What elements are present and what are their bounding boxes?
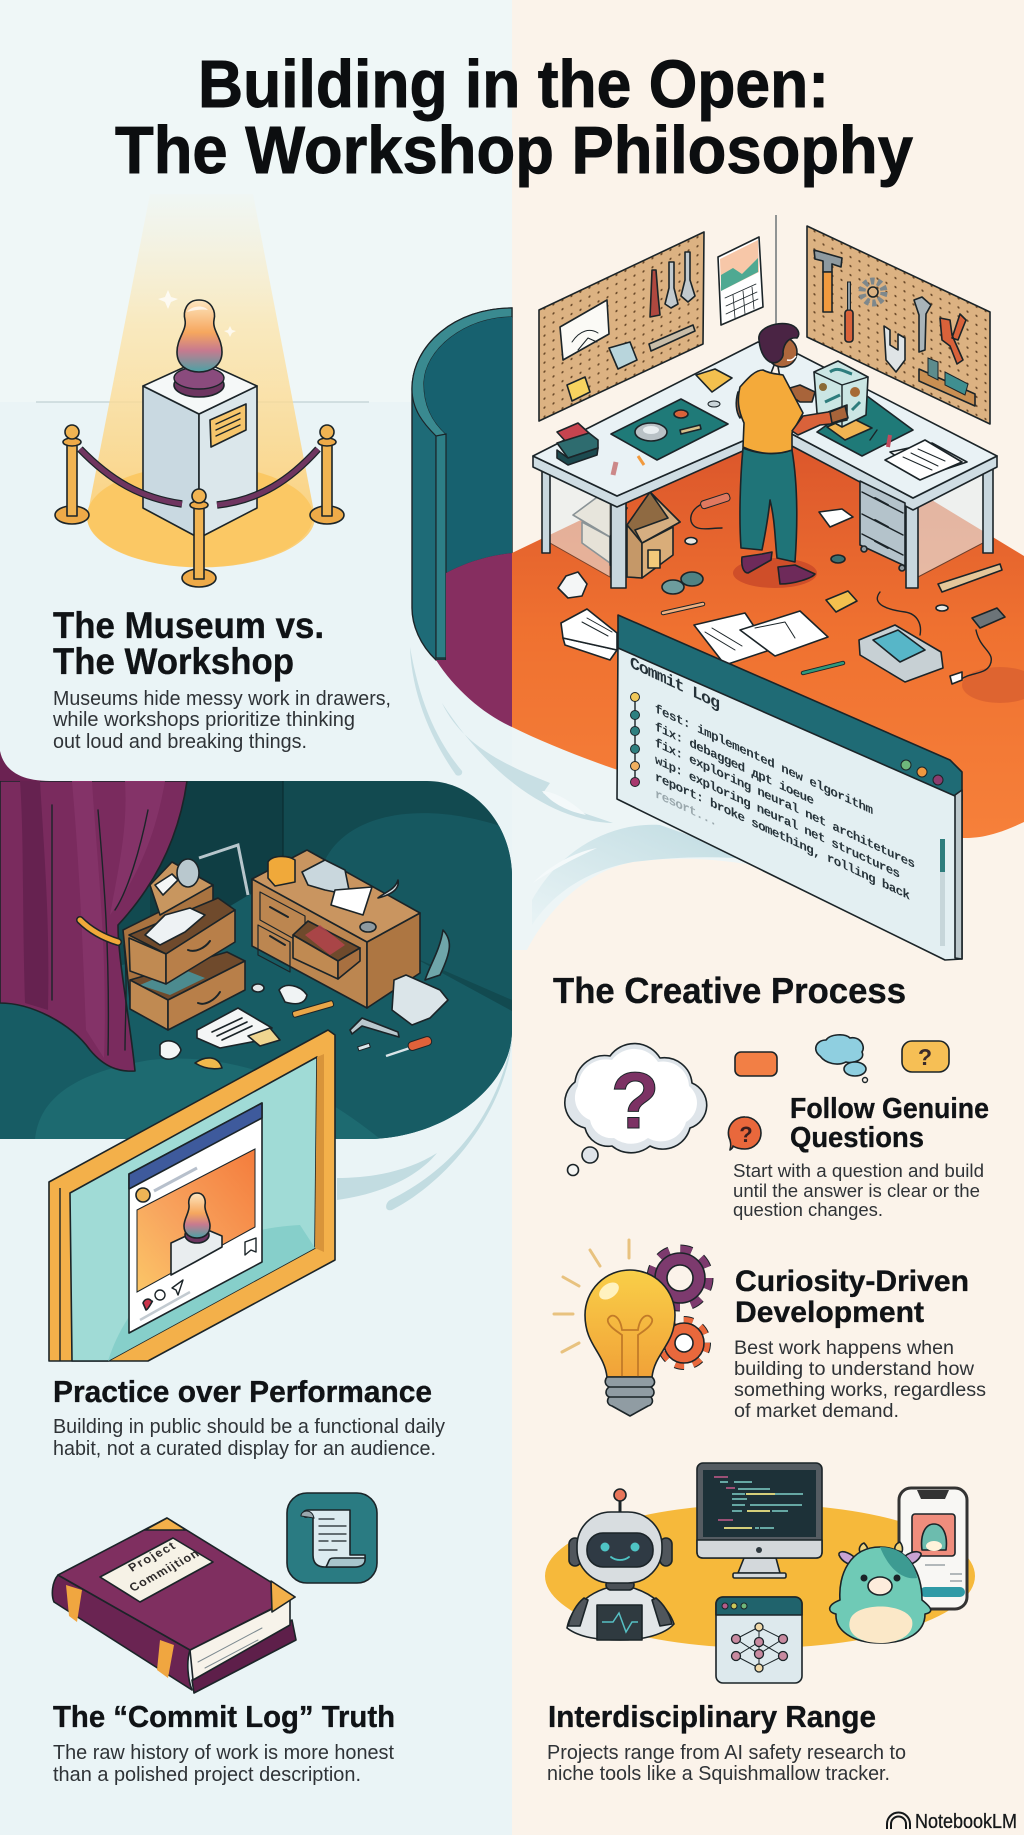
book label text: Commijtion xyxy=(126,1547,202,1594)
text: interdisciplinary description xyxy=(547,1741,906,1785)
illustration: museum pedestal xyxy=(36,194,369,587)
decorative swooshes xyxy=(410,647,613,883)
text: curiosity description: building to understand how xyxy=(734,1358,975,1380)
background: lower cool tone xyxy=(0,402,512,1835)
velvet rope xyxy=(80,449,318,505)
icon: scroll xyxy=(287,1493,377,1583)
text: museum description: while workshops prioritize thinking xyxy=(52,708,355,731)
commit messages: fix: exploring neural net architetures xyxy=(655,736,915,872)
wall highlight xyxy=(325,813,512,1000)
wall calendar xyxy=(718,237,763,325)
text: curiosity description: Best work happens when xyxy=(734,1337,954,1359)
curtain drum xyxy=(412,308,512,727)
background: cool region between sections xyxy=(512,720,780,950)
text: commit log description xyxy=(53,1741,394,1786)
heading: museum vs workshop xyxy=(53,605,324,682)
text: curiosity description xyxy=(734,1337,986,1422)
book pages xyxy=(192,1620,296,1693)
desktop monitor with code xyxy=(697,1463,822,1578)
social post card xyxy=(129,1103,262,1333)
teal mirror xyxy=(70,1057,317,1361)
heading: practice over performance: Practice over Performance xyxy=(53,1374,432,1409)
mirror reflection xyxy=(108,1225,315,1361)
floor clutter xyxy=(558,493,1005,684)
near arm xyxy=(792,405,847,435)
commit timeline xyxy=(630,692,640,786)
icon: light bulb with gears xyxy=(554,1240,709,1416)
commit messages: wip: exploring neural net structures xyxy=(655,753,900,882)
text: museum description: out loud and breaking things. xyxy=(53,730,307,753)
icon: thought cloud with question mark xyxy=(565,1044,707,1176)
text: practice description xyxy=(53,1415,446,1460)
left pegboard xyxy=(539,232,704,421)
commit messages: report: broke something, rolling back xyxy=(655,770,910,904)
background: mist near window xyxy=(532,825,760,925)
glowing artifact xyxy=(158,290,236,397)
heading: museum vs workshop: The Workshop xyxy=(53,641,294,682)
shoes xyxy=(742,552,772,573)
floor stain xyxy=(962,667,1024,703)
floor xyxy=(0,880,512,1139)
left drawers xyxy=(123,845,248,1030)
stanchion left xyxy=(55,425,89,524)
back wall xyxy=(150,781,282,916)
yellow ellipse backdrop xyxy=(545,1504,975,1648)
gold frame xyxy=(49,1030,335,1361)
trousers xyxy=(740,448,797,562)
right dresser xyxy=(252,850,420,1008)
commit messages xyxy=(655,702,915,904)
title: The Workshop Philosophy xyxy=(115,113,913,188)
window controls xyxy=(901,760,943,785)
icon: yellow question tag xyxy=(902,1041,949,1072)
purple curtain xyxy=(0,781,187,1071)
text: interdisciplinary description: niche tools like a Squishmallow tracker. xyxy=(547,1762,890,1785)
phone app xyxy=(899,1488,967,1609)
scrollbar xyxy=(940,839,945,946)
text: questions description: question changes. xyxy=(733,1199,883,1220)
text: commit log description: than a polished project description. xyxy=(53,1763,361,1786)
heading: the creative process: The Creative Process xyxy=(553,970,906,1011)
text: museum description: Museums hide messy work in drawers, xyxy=(53,687,391,710)
orange gear xyxy=(661,1320,707,1366)
floor highlight xyxy=(35,1058,380,1139)
workbench xyxy=(533,342,997,588)
rays xyxy=(554,1240,629,1352)
heading: curiosity-driven development: Development xyxy=(735,1296,924,1329)
head xyxy=(767,337,797,367)
icon: thought cloud with question mark: ? xyxy=(611,1056,659,1145)
illustration: project book xyxy=(52,1518,296,1693)
icon: yellow question tag: ? xyxy=(918,1044,932,1070)
title: Building in the Open: xyxy=(198,47,829,122)
text: curiosity description: something works, regardless xyxy=(734,1379,986,1401)
bulb glass xyxy=(585,1270,675,1377)
commit messages: fix: debagged дpt ioeue xyxy=(655,720,814,809)
book cover xyxy=(58,1518,295,1650)
text: curiosity description: of market demand. xyxy=(734,1400,899,1422)
bench items xyxy=(557,369,967,480)
text: questions description: until the answer is clear or the xyxy=(733,1180,980,1201)
far hand xyxy=(790,385,815,402)
heading: curiosity-driven development xyxy=(735,1265,969,1329)
heading: commit log truth: The “Commit Log” Truth xyxy=(53,1699,395,1734)
heading: follow genuine questions: Follow Genuine xyxy=(790,1093,989,1125)
purple gear xyxy=(651,1249,709,1307)
text: interdisciplinary description: Projects range from AI safety research to xyxy=(547,1741,906,1764)
cardboard box behind glass xyxy=(573,492,680,578)
illustration: workshop xyxy=(412,215,1024,838)
stanchion right xyxy=(310,425,344,524)
bulb base xyxy=(605,1377,655,1416)
neural network window xyxy=(716,1597,802,1683)
right pegboard xyxy=(807,226,990,424)
title xyxy=(115,47,913,188)
book spine xyxy=(52,1575,192,1690)
background: cool left side xyxy=(0,0,512,1835)
decorative swooshes lower xyxy=(337,1040,512,1210)
background: warm right side xyxy=(512,0,1024,1835)
shirt xyxy=(738,370,803,453)
text: commit log description: The raw history of work is more honest xyxy=(53,1741,394,1764)
heading: curiosity-driven development: Curiosity-Driven xyxy=(735,1265,969,1298)
curtain corner above the backroom xyxy=(0,751,50,781)
model cube xyxy=(814,361,872,440)
text: questions description xyxy=(733,1160,984,1220)
text: practice description: habit, not a curated display for an audience. xyxy=(53,1437,436,1460)
back arm xyxy=(736,392,746,418)
heading: interdisciplinary range: Interdisciplinary Range xyxy=(548,1699,876,1734)
text: museum description xyxy=(52,687,391,753)
squishmallow cow xyxy=(830,1542,931,1643)
stanchion front xyxy=(182,489,216,587)
orange floor xyxy=(512,420,1024,838)
robot xyxy=(567,1489,674,1640)
text: questions description: Start with a question and build xyxy=(733,1160,984,1181)
window title: Commit Log xyxy=(630,655,720,715)
book label xyxy=(100,1538,213,1602)
pedestal xyxy=(143,360,257,538)
commit messages: resort... xyxy=(655,787,717,830)
illustration: interdisciplinary projects xyxy=(545,1463,975,1683)
heading: follow genuine questions xyxy=(790,1093,989,1154)
icon: blue thought bubble xyxy=(816,1035,868,1082)
book label text: Project xyxy=(125,1539,178,1574)
spotlight beam xyxy=(87,194,315,567)
heading: museum vs workshop: The Museum vs. xyxy=(53,605,324,646)
text: practice description: Building in public should be a functional daily xyxy=(53,1415,446,1438)
drawer unit xyxy=(860,481,905,571)
heading: follow genuine questions: Questions xyxy=(790,1122,924,1154)
commit messages: fest: implemented new elgorithm xyxy=(655,702,873,818)
person xyxy=(733,324,848,588)
icon: orange question bubble: ? xyxy=(739,1122,753,1147)
illustration: framed social post xyxy=(49,1030,335,1361)
icon: orange question bubble xyxy=(728,1117,761,1150)
spotlight pool xyxy=(87,465,313,567)
icon: orange card xyxy=(735,1052,777,1076)
scattered tools and paper xyxy=(160,930,449,1069)
illustration: messy backroom xyxy=(0,781,512,1139)
wall corner line xyxy=(775,215,777,330)
commit log window xyxy=(617,615,962,960)
